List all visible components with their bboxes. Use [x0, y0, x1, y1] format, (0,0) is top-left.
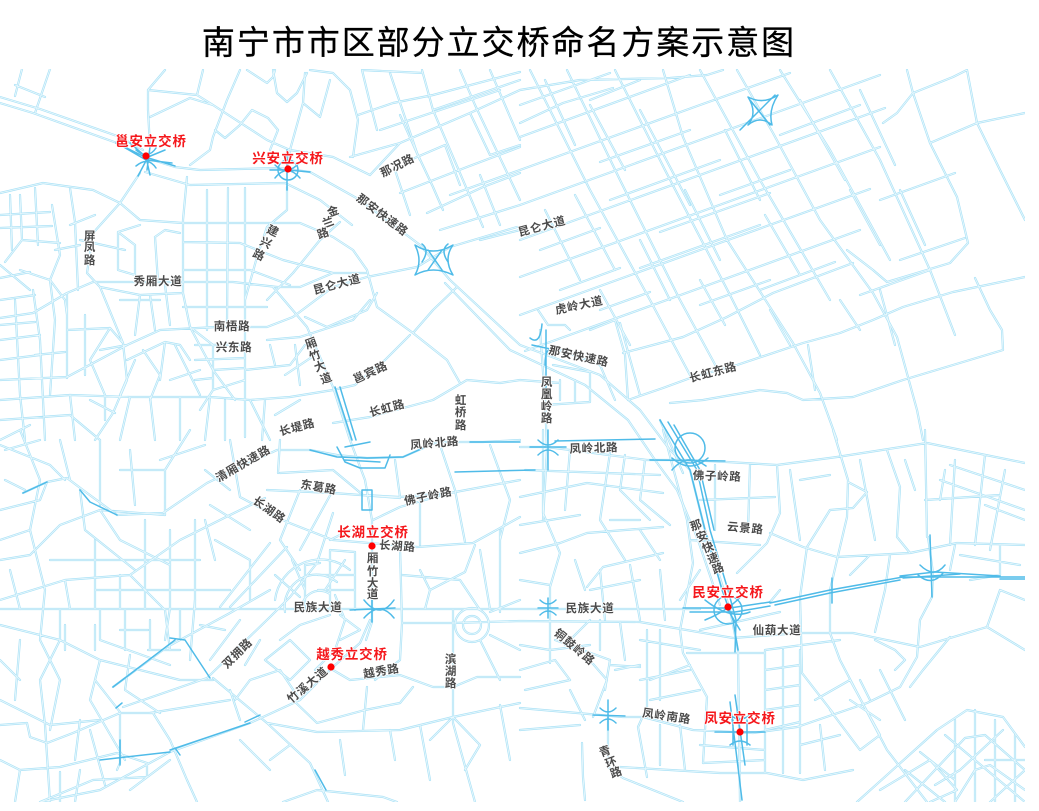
road name labels: 清厢快速路: [213, 442, 273, 485]
interchange: 长湖立交桥: 长湖立交桥: [337, 524, 409, 540]
interchange: 民安立交桥: 民安立交桥: [692, 584, 764, 600]
road name labels: 民族大道: [294, 600, 342, 614]
interchange: 兴安立交桥: [252, 150, 324, 173]
road name labels: 云景路: [727, 519, 764, 537]
road name labels: 青环路: [597, 742, 624, 781]
interchange: 越秀立交桥: [316, 646, 388, 671]
interchange: 邕安立交桥: 邕安立交桥: [115, 133, 187, 149]
interchange: 长湖立交桥: [337, 524, 409, 550]
road name labels: 南梧路: [214, 319, 250, 333]
road name labels: 虹桥路: [455, 393, 467, 432]
road name labels: 长虹东路: [688, 359, 738, 385]
road name labels: 长湖路: [250, 493, 288, 526]
road name labels: 民族大道: [566, 601, 614, 615]
road name labels: 长虹路: [367, 397, 406, 420]
road name labels: 秀厢大道: [134, 274, 182, 288]
road name labels: 那安快速路: [354, 191, 411, 239]
interchange: 凤安立交桥: 凤安立交桥: [704, 710, 776, 726]
road name labels: 那安快速路: [688, 517, 726, 577]
road name labels: 厢竹大道: [303, 335, 334, 387]
road name labels: 兴东路: [216, 340, 252, 354]
interchange: 兴安立交桥: 兴安立交桥: [252, 150, 324, 166]
road name labels: 竹溪大道: [284, 664, 331, 706]
road name labels: 虎岭大道: [554, 293, 604, 317]
road name labels: 昆仑大道: [517, 213, 567, 239]
interchange: 民安立交桥: [692, 584, 764, 611]
road name labels: 佛子岭路: [403, 484, 453, 508]
road name labels: 金兰路: [315, 202, 341, 242]
road name labels: 凤岭北路: [569, 440, 618, 456]
road name labels: 越秀路: [362, 661, 401, 681]
road name labels: 邕宾路: [351, 358, 390, 386]
road name labels: 昆仑大道: [312, 271, 362, 297]
road name labels: 东葛路: [299, 477, 338, 497]
road name labels: 那况路: [378, 151, 417, 180]
road name labels: [84, 151, 801, 781]
road name labels: 建兴路: [251, 222, 282, 264]
road name labels: 凤岭南路: [641, 706, 692, 726]
road name labels: 佛子岭路: [693, 468, 742, 484]
road name labels: 凤凰岭路: [541, 376, 553, 425]
road name labels: 仙葫大道: [753, 623, 801, 637]
interchange: 越秀立交桥: 越秀立交桥: [316, 646, 388, 662]
title: 南宁市市区部分立交桥命名方案示意图: [202, 24, 796, 61]
road name labels: 厢竹大道: [367, 552, 379, 601]
road name labels: 长湖路: [379, 538, 416, 554]
road name labels: 滨湖路: [445, 652, 457, 690]
interchange: 凤安立交桥: [704, 710, 776, 736]
road name labels: 双拥路: [219, 635, 255, 671]
road name labels: 屏凤路: [84, 230, 96, 267]
road name labels: 那安快速路: [548, 343, 610, 369]
road name labels: 铜鼓岭路: [551, 626, 598, 668]
interchange: 邕安立交桥: [115, 133, 187, 160]
road name labels: 长堤路: [277, 416, 316, 439]
road name labels: 凤岭北路: [410, 434, 460, 452]
